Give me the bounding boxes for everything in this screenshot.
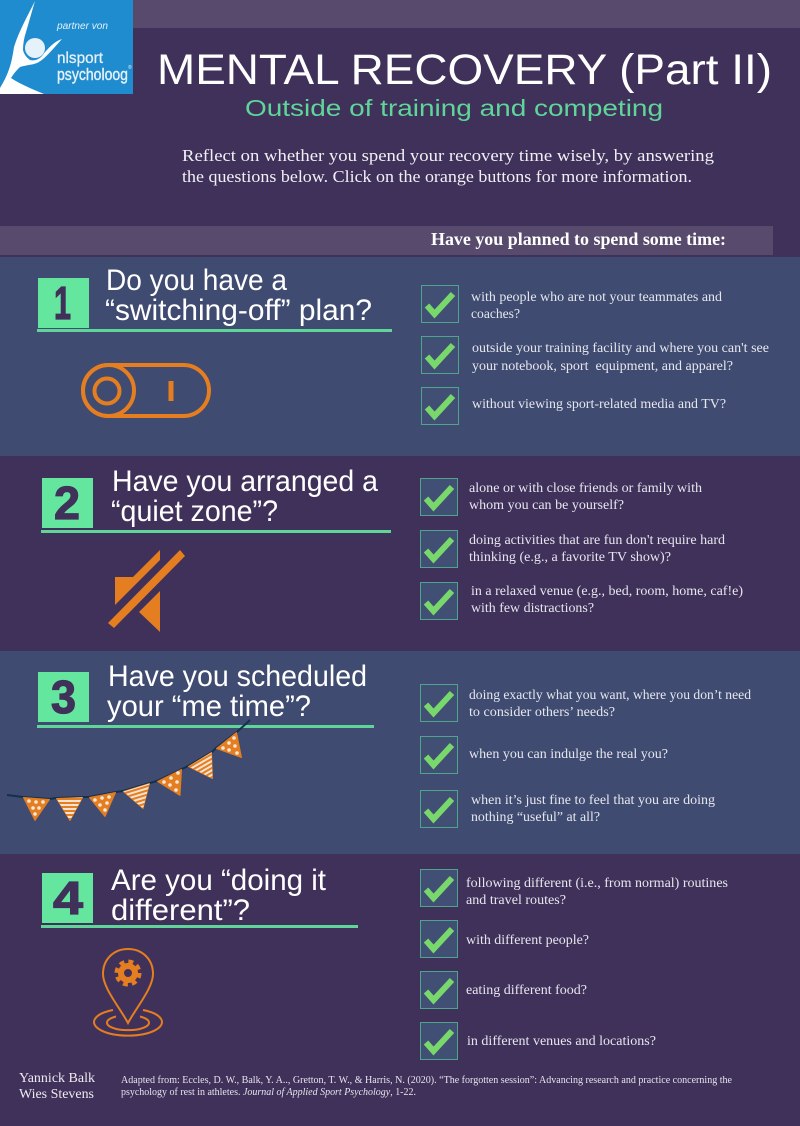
check item 4.2 [420, 920, 589, 958]
citation: Adapted from: Eccles, D. W., Balk, Y. A.., Gretton, T. W., & Harris, N. (2020). “The forgotten session”: Advancing research and practice concerning the [121, 1075, 733, 1086]
check item 3.3: when it’s just fine to feel that you are doing [471, 793, 715, 808]
check item 4.4 [420, 1022, 656, 1060]
icon: toggle switch [83, 365, 209, 416]
logo: nlsport psycholoog [0, 0, 133, 94]
checklist 1 [422, 286, 769, 424]
authors: Yannick Balk [19, 1071, 95, 1086]
panel 3: me time [0, 651, 800, 854]
logo: nlsport psycholoog: nlsport [57, 50, 104, 67]
check item 3.1 [420, 684, 751, 722]
check item 3.2: when you can indulge the real you? [469, 747, 668, 762]
intro text [182, 146, 715, 186]
number badge 4 [42, 872, 93, 924]
heading 1 [105, 264, 372, 327]
heading 4: different”? [111, 894, 250, 927]
check item 1.2 [422, 336, 769, 374]
heading 3: Have you scheduled [108, 660, 367, 693]
check item 4.1 [420, 870, 728, 908]
heading 2: “quiet zone”? [111, 495, 278, 528]
checklist 4 [420, 870, 728, 1060]
logo: nlsport psycholoog: psycholoog [57, 65, 128, 84]
check item 2.3: with few distractions? [471, 601, 594, 616]
check item 2.1 [420, 478, 702, 516]
check item 3.3: nothing “useful” at all? [471, 810, 600, 825]
check item 1.3: without viewing sport-related media and TV? [472, 397, 726, 412]
check item 3.1: doing exactly what you want, where you don’t need [469, 688, 751, 703]
heading 4: Are you “doing it [111, 864, 327, 897]
check item 2.1: whom you can be yourself? [469, 498, 624, 513]
check item 4.2: with different people? [466, 933, 589, 948]
top bar [133, 0, 800, 28]
check item 3.1: to consider others’ needs? [469, 705, 615, 720]
check item 2.2: doing activities that are fun don't require hard [469, 533, 725, 548]
authors [19, 1071, 95, 1102]
heading underline 1 [37, 329, 392, 332]
icon: bunting [7, 720, 250, 820]
number badge 1 [38, 277, 89, 329]
number badge 2: 2 [54, 477, 80, 529]
citation [121, 1075, 733, 1098]
icon: muted speaker [108, 550, 185, 632]
logo: nlsport psycholoog: partner von [56, 21, 108, 32]
check item 1.1 [422, 286, 722, 322]
heading 2: Have you arranged a [112, 465, 378, 498]
heading underline 3 [37, 725, 374, 728]
check item 2.3: in a relaxed venue (e.g., bed, room, home, caf!e) [471, 584, 743, 599]
intro text: Reflect on whether you spend your recovery time wisely, by answering [182, 146, 715, 165]
citation: psychology of rest in athletes. Journal of Applied Sport Psychology, 1-22. [121, 1087, 416, 1098]
intro text: the questions below. Click on the orange buttons for more information. [182, 167, 692, 186]
check item 2.3 [420, 582, 743, 620]
check item 1.2: your notebook, sport equipment, and apparel? [472, 359, 733, 374]
heading 3: your “me time”? [107, 690, 311, 723]
heading 1: Do you have a [106, 264, 287, 297]
number badge 1: 1 [54, 277, 71, 329]
number badge 3: 3 [51, 671, 76, 723]
heading underline 4 [41, 925, 358, 928]
heading 3 [107, 660, 367, 723]
heading 1: “switching-off” plan? [105, 294, 372, 327]
check item 1.1: coaches? [471, 307, 520, 322]
check item 4.1: and travel routes? [466, 893, 566, 908]
check item 1.3 [422, 388, 726, 424]
checklist 3 [420, 684, 751, 828]
check item 3.2 [420, 736, 668, 774]
logo: nlsport psycholoog: ® [128, 64, 132, 71]
panel 4: doing it different [41, 864, 728, 1060]
column header bar [0, 226, 773, 255]
check item 2.1: alone or with close friends or family with [469, 481, 702, 496]
authors: Wies Stevens [19, 1087, 94, 1102]
subtitle: Outside of training and competing [245, 95, 663, 121]
panel 2: quiet zone [41, 465, 743, 632]
heading underline 2 [41, 530, 391, 533]
icon: location pin with gear [94, 949, 162, 1036]
number badge 4: 4 [53, 872, 83, 924]
number badge 2 [42, 477, 93, 529]
column header bar: Have you planned to spend some time: [431, 229, 726, 249]
panel 1: switching-off plan [0, 257, 800, 456]
check item 4.3 [420, 972, 587, 1008]
heading 2 [111, 465, 378, 528]
check item 3.3 [420, 790, 715, 828]
title: MENTAL RECOVERY (Part II) [157, 46, 772, 94]
check item 4.4: in different venues and locations? [467, 1034, 656, 1049]
checklist 2 [420, 478, 743, 620]
check item 4.3: eating different food? [466, 983, 587, 998]
check item 1.2: outside your training facility and where you can't see [472, 341, 769, 356]
check item 4.1: following different (i.e., from normal) routines [466, 876, 728, 891]
number badge 3 [38, 671, 89, 723]
heading 4 [111, 864, 327, 927]
check item 2.2 [420, 530, 725, 568]
check item 1.1: with people who are not your teammates and [471, 290, 722, 305]
check item 2.2: thinking (e.g., a favorite TV show)? [469, 550, 671, 565]
